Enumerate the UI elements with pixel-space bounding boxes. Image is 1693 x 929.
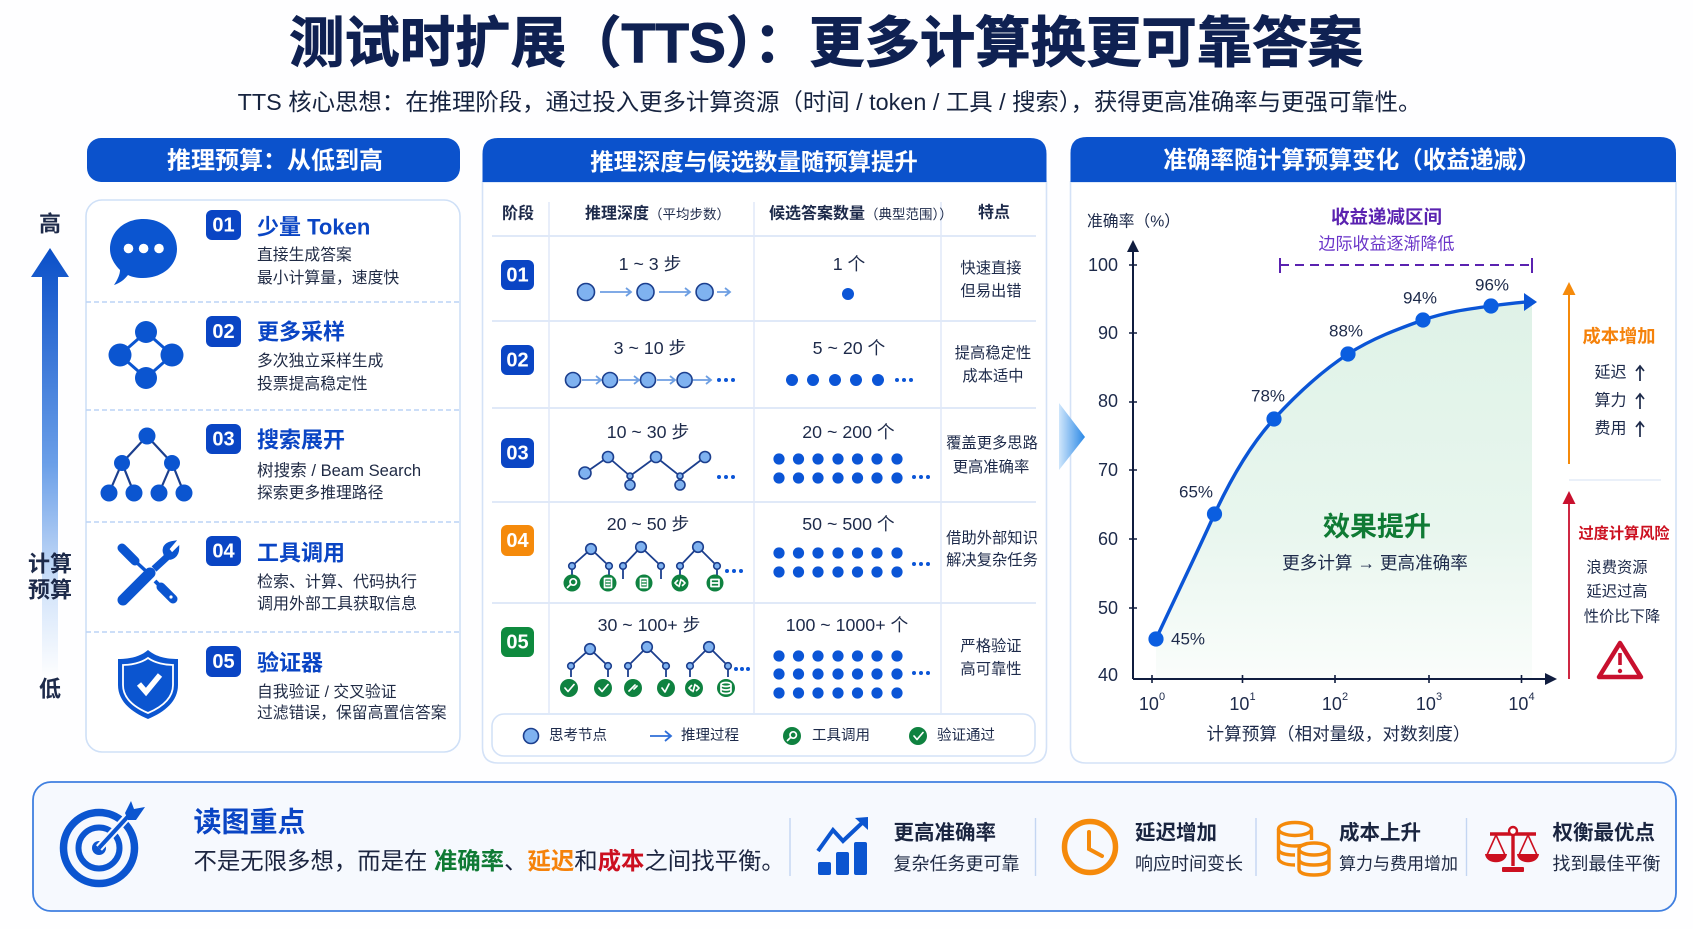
panel: depth and candidates table [482,138,1046,763]
panel: accuracy chart [1070,137,1676,763]
row 05: 自我验证 / 交叉验证 [257,683,397,701]
item: higher accuracy: 复杂任务更可靠 [894,854,1020,874]
over-compute risk side note [1562,491,1670,679]
chart axes: 10 [1416,694,1436,714]
vertical budget arrow: 计算 [28,552,72,576]
row 01: 少量 Token [257,214,370,240]
icon: tools [122,542,178,600]
accuracy curve: 96% [1475,276,1509,294]
row 03: 树搜索 / Beam Search [257,461,421,480]
vertical budget arrow: 高 [39,212,61,236]
chart axes [1087,212,1557,744]
panel heading: table [482,138,1046,182]
icon: search tree [100,428,192,502]
table row 01: 1 个 [833,254,866,274]
row 05: 过滤错误，保留高置信答案 [257,704,447,722]
panel: budget levels [86,138,460,752]
takeaway text: 读图重点 [194,806,306,838]
table row 01: 快速直接 [960,260,1022,277]
table row 04: 20 ~ 50 步 [607,514,689,534]
panel heading: budget: 推理预算：从低到高 [167,148,383,174]
chart axes: 10 [1139,694,1159,714]
panel: key takeaway [33,782,1676,911]
table row 01: 1 ~ 3 步 [619,254,681,274]
icon: coin stacks [1278,822,1329,875]
row 05: 05 [212,651,235,673]
row 01: 直接生成答案 [257,246,352,264]
chart axes: 2 [1342,691,1348,703]
chart axes: 10 [1508,694,1528,714]
table row 04: 04 [506,530,529,552]
chart axes: 计算预算（相对量级，对数刻度） [1207,724,1470,744]
row 03: 搜索展开 [257,428,345,452]
chart axes: 4 [1528,691,1535,703]
table row 03: 03 [506,442,529,464]
item: cost: 算力与费用增加 [1339,854,1458,874]
chart axes: 10 [1229,694,1249,714]
item: cost [1278,820,1458,875]
table row 01: 但易出错 [960,283,1022,300]
row 04: 调用外部工具获取信息 [257,595,417,613]
chart axes: 3 [1436,691,1442,703]
chart axes: 0 [1159,691,1165,703]
diminishing returns annotation [1280,206,1532,273]
row 04: 工具调用 [257,540,345,566]
item: cost: 成本上升 [1339,820,1421,844]
table header: 候选答案数量（典型范围）） [769,204,953,222]
chart axes: 10 [1322,694,1342,714]
icon: shield [118,650,178,719]
cost increase side note [1562,282,1656,464]
cost increase side note: 算力 [1594,390,1627,410]
table row 04: 50 ~ 500 个 [802,514,895,534]
chart axes: 100 [1088,255,1118,275]
area under curve [1156,302,1532,679]
table legend: 工具调用 [812,727,870,744]
chart axes: 70 [1098,460,1118,480]
row 01 [206,210,399,287]
icon: target [64,801,145,884]
chart axes: 50 [1098,598,1118,618]
row 04 [206,536,417,613]
row 02: 多次独立采样生成 [257,352,384,370]
chart axes: 90 [1098,323,1118,343]
table row 03 [501,422,1038,490]
row 03: 探索更多推理路径 [257,484,384,502]
icon: balance scale [1485,827,1539,872]
table row 05: 05 [506,632,529,654]
panel heading: chart [1070,137,1676,182]
row 04: 04 [212,540,235,562]
cost increase side note: 成本增加 [1582,326,1656,346]
table row 03: 20 ~ 200 个 [802,422,895,442]
vertical budget arrow: 预算 [28,578,72,602]
item: higher accuracy: 更高准确率 [894,820,996,844]
accuracy curve [1148,276,1537,648]
takeaway text: 不是无限多想，而是在 准确率、延迟和成本之间找平衡。 [194,848,785,874]
table header: 推理深度（平均步数） [585,204,730,222]
chart axes: 准确率（%） [1087,212,1180,230]
table row 03: 更高准确率 [953,459,1029,476]
cost increase side note: 延迟 [1594,364,1627,382]
over-compute risk side note: 过度计算风险 [1578,524,1670,542]
icon: sampling nodes [108,321,184,389]
row 03 [206,424,421,502]
row 01: 01 [212,214,235,236]
subtitle: TTS 核心思想：在推理阶段，通过投入更多计算资源（时间 / token / 工具 / 搜索），获得更高准确率与更强可靠性。 [238,89,1421,115]
over-compute risk side note: 浪费资源 [1586,560,1648,576]
chart axes: 80 [1098,391,1118,411]
table row 04: 解决复杂任务 [946,552,1038,569]
over-compute risk side note: 性价比下降 [1584,608,1660,626]
table row 04 [501,514,1038,592]
item: higher accuracy [818,817,1020,875]
table row 05: 高可靠性 [960,661,1022,678]
table header: 阶段 [502,204,534,222]
item: trade-off: 找到最佳平衡 [1552,854,1660,874]
vertical budget arrow: 低 [39,676,61,702]
effect label [1282,512,1468,573]
icon: clock [1064,822,1116,872]
row 01: 最小计算量，速度快 [257,268,399,287]
icon: warning triangle [1599,643,1641,677]
row 04: 检索、计算、代码执行 [257,572,417,591]
accuracy curve: 94% [1403,288,1437,308]
table legend [492,714,1035,756]
table header [502,202,1010,222]
table row 05: 100 ~ 1000+ 个 [786,615,909,635]
effect label: 效果提升 [1323,512,1431,542]
table row 02: 5 ~ 20 个 [813,338,886,358]
accuracy curve: 65% [1179,482,1213,502]
vertical budget arrow [28,212,72,702]
diminishing returns annotation: 收益递减区间 [1331,206,1442,228]
panel heading: budget [87,138,460,182]
row 02: 投票提高稳定性 [257,375,368,393]
icon: rising bars [818,817,868,875]
effect label: 更多计算 → 更高准确率 [1282,553,1468,573]
table row 01: 01 [506,264,529,286]
accuracy curve: 78% [1251,386,1285,406]
row 02 [206,316,384,393]
table row 05: 30 ~ 100+ 步 [598,615,700,635]
accuracy curve: 45% [1171,630,1205,648]
item: latency: 延迟增加 [1135,822,1217,844]
takeaway text [194,806,785,874]
item: trade-off [1485,822,1660,874]
chart axes: 40 [1098,665,1118,685]
table row 03: 覆盖更多思路 [946,435,1038,452]
title: 测试时扩展（TTS）：更多计算换更可靠答案 [289,12,1363,74]
row 03: 03 [212,428,235,450]
panel heading: chart: 准确率随计算预算变化（收益递减） [1163,146,1541,174]
table row 01 [501,254,1022,300]
table header: 特点 [978,202,1010,222]
table row 03: 10 ~ 30 步 [607,422,689,442]
row 02: 02 [212,321,235,343]
item: latency [1064,822,1243,874]
table row 02: 成本适中 [962,368,1024,385]
table legend: 思考节点 [549,727,607,744]
panel heading: table: 推理深度与候选数量随预算提升 [590,149,918,175]
item: trade-off: 权衡最优点 [1552,822,1655,844]
table row 05 [501,615,1022,699]
icon: chat bubble [110,219,177,285]
cost increase side note: 费用 [1594,420,1627,438]
accuracy curve: 88% [1329,322,1363,340]
table legend: 验证通过 [937,727,995,744]
table row 02 [501,338,1031,388]
arrow: table to chart [1059,403,1085,470]
table row 02: 02 [506,350,529,372]
over-compute risk side note: 延迟过高 [1586,584,1648,600]
table row 04: 借助外部知识 [946,530,1038,547]
chart axes: 1 [1249,691,1256,703]
table legend: 推理过程 [681,727,739,744]
row 05: 验证器 [257,650,323,676]
diminishing returns annotation: 边际收益逐渐降低 [1318,234,1454,254]
chart axes: 60 [1098,529,1118,549]
row 05 [206,646,447,722]
item: latency: 响应时间变长 [1135,854,1243,874]
row 02: 更多采样 [257,320,345,344]
table row 02: 3 ~ 10 步 [614,338,686,358]
table row 02: 提高稳定性 [955,345,1031,362]
table row 05: 严格验证 [960,638,1022,655]
